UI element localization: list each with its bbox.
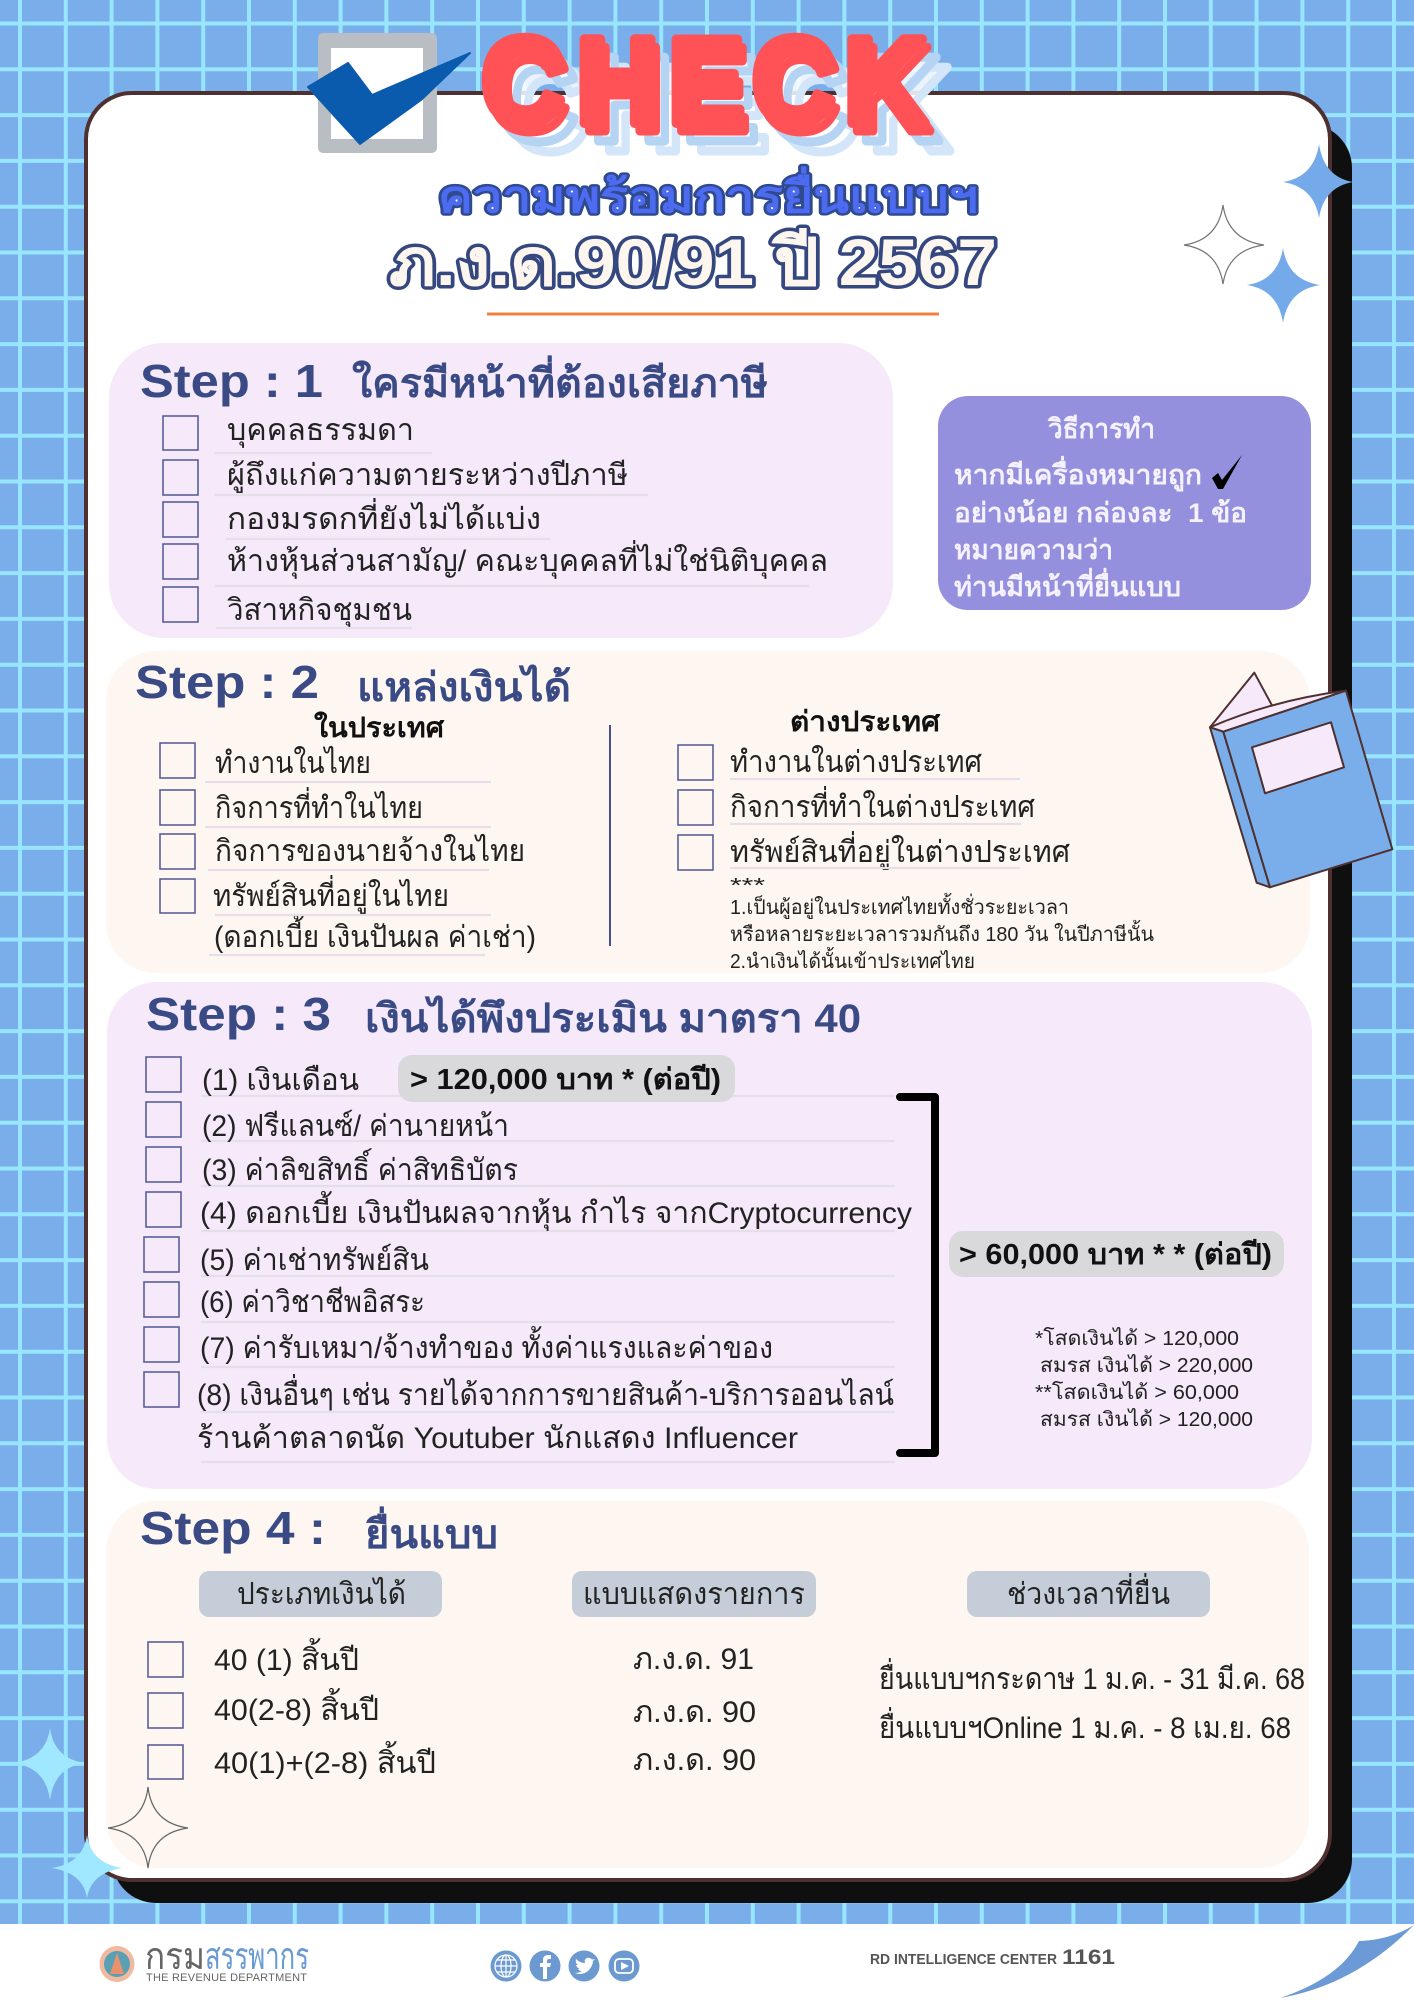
- icon: facebook: [530, 1950, 560, 1982]
- contact centre: [870, 1946, 1115, 1969]
- domestic column: ทรัพย์สินที่อยู่ในไทย: [213, 875, 449, 914]
- column header: income type: ประเภทเงินได้: [237, 1576, 406, 1611]
- column divider: [609, 725, 611, 946]
- step 3 underlines and list: (4) ดอกเบี้ย เงินปันผลจากหุ้น กำไร จากCryptocurrency: [200, 1191, 912, 1232]
- step 3 heading: เงินได้พึงประเมิน มาตรา 40: [365, 995, 861, 1041]
- revenue department wordmark: THE REVENUE DEPARTMENT: [146, 1972, 307, 1984]
- domestic column: กิจการที่ทำในไทย: [215, 787, 423, 825]
- income type rows: [148, 1638, 436, 1780]
- column header: income type: [199, 1571, 442, 1617]
- domestic column: ทำงานในไทย: [215, 745, 371, 780]
- social icons: [490, 1950, 640, 1982]
- step 4 heading: Step 4 :: [140, 1502, 326, 1554]
- step 3 underlines and list: (5) ค่าเช่าทรัพย์สิน: [200, 1243, 429, 1277]
- form rows: ภ.ง.ด. 90: [633, 1696, 756, 1729]
- icon: twitter: [568, 1950, 600, 1982]
- step 1 list: วิสาหกิจชุมชน: [227, 594, 412, 629]
- form rows: ภ.ง.ด. 90: [633, 1744, 756, 1777]
- filing periods: [879, 1658, 1305, 1745]
- column header: form: แบบแสดงรายการ: [583, 1578, 805, 1611]
- subtitle: readiness to file: ความพร้อมการยื่นแบบฯ: [438, 166, 978, 222]
- pill: salary threshold: [398, 1055, 735, 1102]
- step 4 heading: [140, 1502, 498, 1557]
- foreign income conditions: [730, 875, 1154, 973]
- icon: blue sparkle lower: [1247, 248, 1320, 323]
- income type rows: 40 (1) สิ้นปี: [214, 1638, 359, 1677]
- icon: blue sparkle top: [1283, 144, 1353, 218]
- step 3 underlines and list: (1) เงินเดือน: [202, 1064, 359, 1097]
- domestic column: [160, 711, 536, 955]
- column header: filing period: ช่วงเวลาที่ยื่น: [1007, 1573, 1170, 1611]
- pill: salary threshold: > 120,000 บาท * (ต่อปี): [410, 1064, 721, 1096]
- icon: outline sparkle: [1184, 205, 1264, 284]
- filing periods: ยื่นแบบฯOnline 1 ม.ค. - 8 เม.ย. 68: [879, 1707, 1291, 1745]
- title: CHECK: CHECK: [487, 20, 931, 157]
- title: CHECK: CHECK: [496, 30, 940, 167]
- title underline: [487, 312, 939, 316]
- revenue department wordmark: [145, 1936, 309, 1984]
- panel: how to use: อย่างน้อย กล่องละ 1 ข้อ: [954, 498, 1247, 528]
- form rows: [633, 1643, 756, 1777]
- foreign column: ต่างประเทศ: [790, 706, 941, 737]
- step 3 heading: Step : 3: [146, 988, 331, 1040]
- step 3 checkboxes: [144, 1057, 181, 1407]
- foreign column: กิจการที่ทำในต่างประเทศ: [730, 786, 1035, 824]
- step 3 underlines and list: (2) ฟรีแลนซ์/ ค่านายหน้า: [202, 1109, 509, 1143]
- panel: step 4: [106, 1501, 1309, 1868]
- contact centre: 1161: [1062, 1946, 1115, 1969]
- domestic column: (ดอกเบี้ย เงินปันผล ค่าเช่า): [214, 915, 536, 954]
- column header: filing period: [967, 1571, 1210, 1617]
- step 1 list: ผู้ถึงแก่ความตายระหว่างปีภาษี: [227, 459, 628, 493]
- panel: how to use: หากมีเครื่องหมายถูก: [954, 455, 1202, 492]
- step 3 underlines and list: ร้านค้าตลาดนัด Youtuber นักแสดง Influencer: [197, 1422, 798, 1455]
- income type rows: 40(1)+(2-8) สิ้นปี: [214, 1741, 436, 1780]
- domestic column: กิจการของนายจ้างในไทย: [215, 833, 525, 868]
- foreign column: ทำงานในต่างประเทศ: [730, 745, 982, 779]
- pill: other income threshold: > 60,000 บาท * * (ต่อปี): [959, 1239, 1272, 1271]
- step 1 checkboxes: [163, 416, 198, 622]
- step 1 heading: ใครมีหน้าที่ต้องเสียภาษี: [352, 355, 768, 406]
- bracket: [900, 1097, 935, 1453]
- panel: step 3: [107, 982, 1312, 1489]
- title: CHECK: CHECK: [507, 40, 951, 177]
- step 2 heading: แหล่งเงินได้: [357, 664, 571, 710]
- panel: how to use: หมายความว่า: [954, 535, 1113, 565]
- threshold notes: สมรส เงินได้ > 220,000: [1040, 1354, 1253, 1377]
- revenue department wordmark: สรรพากร: [205, 1936, 309, 1978]
- subtitle: form and year: ภ.ง.ด.90/91 ปี 2567: [389, 225, 997, 299]
- step 3 heading: [146, 988, 861, 1041]
- icon: youtube: [608, 1950, 640, 1982]
- foreign income conditions: ***: [730, 875, 765, 897]
- threshold notes: สมรส เงินได้ > 120,000: [1040, 1408, 1253, 1431]
- threshold notes: *โสดเงินได้ > 120,000: [1035, 1327, 1239, 1350]
- foreign income conditions: 2.นำเงินได้นั้นเข้าประเทศไทย: [730, 947, 975, 973]
- corner swoosh: [1280, 1925, 1414, 1998]
- panel: step 1: [109, 343, 893, 638]
- title: CHECK: CHECK: [482, 12, 926, 149]
- white card: [86, 93, 1330, 1880]
- icon: light sparkle bottom: [52, 1835, 122, 1898]
- filing periods: ยื่นแบบฯกระดาษ 1 ม.ค. - 31 มี.ค. 68: [879, 1658, 1305, 1696]
- icon: globe: [490, 1950, 522, 1982]
- icon: ticked checkbox: [308, 33, 470, 153]
- icon: black tick: [1212, 455, 1242, 489]
- column header: form: [572, 1571, 816, 1617]
- icon: revenue department seal: [100, 1946, 134, 1982]
- step 1 list: [214, 414, 828, 629]
- income type rows: 40(2-8) สิ้นปี: [214, 1688, 379, 1727]
- step 2 heading: [135, 656, 571, 710]
- foreign income conditions: หรือหลายระยะเวลารวมกันถึง 180 วัน ในปีภาษีนั้น: [730, 920, 1154, 946]
- step 3 underlines and list: (8) เงินอื่นๆ เช่น รายได้จากการขายสินค้า-บริการออนไลน์: [197, 1374, 894, 1412]
- step 4 heading: ยื่นแบบ: [365, 1506, 498, 1557]
- icon: light sparkle left: [14, 1728, 84, 1800]
- step 1 list: บุคคลธรรมดา: [227, 414, 414, 449]
- icon: book: [1210, 673, 1392, 887]
- step 3 underlines and list: [197, 1064, 912, 1462]
- panel: step 2: [106, 651, 1310, 973]
- step 3 underlines and list: (7) ค่ารับเหมา/จ้างทำของ ทั้งค่าแรงและค่าของ: [200, 1326, 773, 1365]
- threshold notes: [1035, 1327, 1253, 1431]
- footer: [100, 1925, 1414, 1998]
- foreign column: ทรัพย์สินที่อยู่ในต่างประเทศ: [730, 831, 1070, 870]
- foreign income conditions: 1.เป็นผู้อยู่ในประเทศไทยทั้งชั่วระยะเวลา: [730, 893, 1069, 920]
- threshold notes: **โสดเงินได้ > 60,000: [1035, 1381, 1239, 1404]
- step 3 underlines and list: (6) ค่าวิชาชีพอิสระ: [200, 1286, 425, 1319]
- panel: how to use: ท่านมีหน้าที่ยื่นแบบ: [954, 567, 1181, 602]
- step 1 heading: [140, 355, 768, 407]
- step 2 heading: Step : 2: [135, 656, 319, 708]
- form rows: ภ.ง.ด. 91: [633, 1643, 754, 1676]
- panel: how to use: วิธีการทำ: [1047, 414, 1155, 444]
- step 1 list: ห้างหุ้นส่วนสามัญ/ คณะบุคคลที่ไม่ใช่นิติบุคคล: [227, 540, 828, 580]
- icon: outline sparkle bottom: [108, 1787, 188, 1868]
- card shadow: [112, 124, 1352, 1903]
- step 1 heading: Step : 1: [140, 355, 323, 407]
- step 3 underlines and list: (3) ค่าลิขสิทธิ์ ค่าสิทธิบัตร: [202, 1148, 518, 1187]
- panel: how to use: [938, 396, 1311, 610]
- revenue department wordmark: กรม: [145, 1936, 205, 1978]
- foreign column: [678, 706, 1070, 870]
- step 1 list: กองมรดกที่ยังไม่ได้แบ่ง: [227, 498, 541, 536]
- domestic column: ในประเทศ: [314, 711, 445, 743]
- pill: other income threshold: [949, 1231, 1284, 1277]
- contact centre: RD INTELLIGENCE CENTER: [870, 1952, 1058, 1968]
